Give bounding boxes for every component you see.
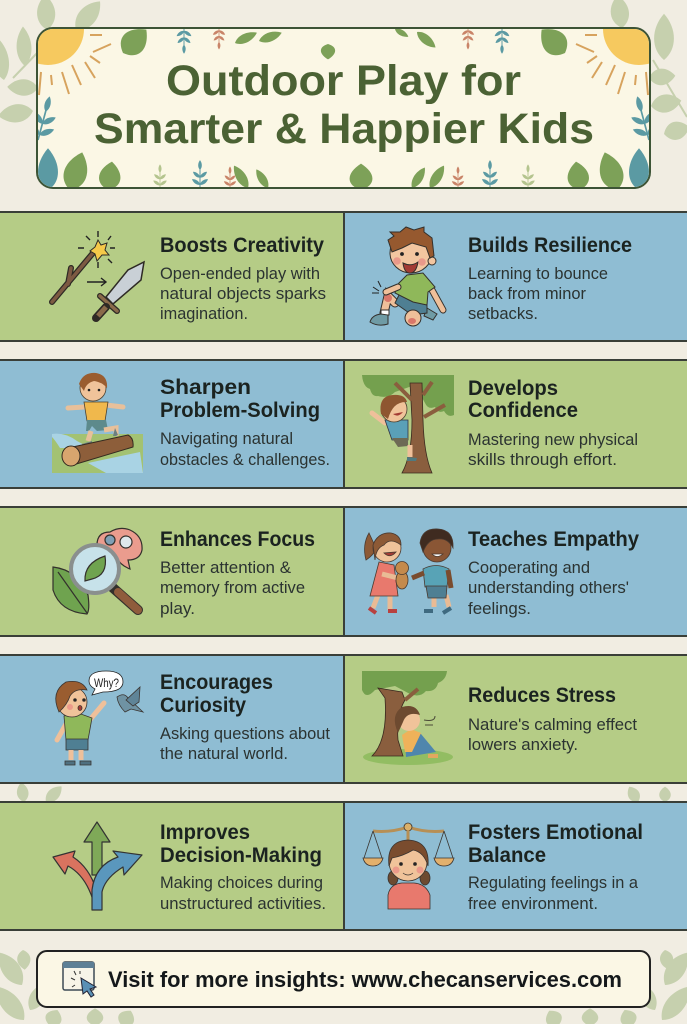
banner title text: Outdoor Play for bbox=[166, 57, 521, 105]
icon: child resting under a tree bbox=[362, 671, 453, 765]
card text bbox=[468, 234, 632, 323]
card text bbox=[468, 377, 638, 469]
card text: Improves bbox=[160, 821, 250, 844]
card text: Enhances Focus bbox=[160, 528, 315, 551]
card: Builds Resilience bbox=[344, 212, 687, 341]
card: Encourages Curiosity bbox=[0, 655, 344, 783]
icon: magnifier, leaf and brain bbox=[53, 528, 142, 614]
card text: Cooperating and bbox=[468, 559, 590, 577]
icon: browser window with cursor bbox=[63, 962, 96, 997]
banner title text: Smarter & Happier Kids bbox=[94, 105, 594, 153]
card text: Problem-Solving bbox=[160, 399, 320, 422]
card text: skills through effort. bbox=[468, 451, 617, 469]
card text: the natural world. bbox=[160, 745, 288, 763]
card text: natural objects sparks bbox=[160, 285, 326, 303]
icon: stick to sword bbox=[52, 231, 144, 318]
card text bbox=[468, 821, 643, 913]
icon: boy balancing on log bbox=[52, 373, 143, 473]
card text: Builds Resilience bbox=[468, 234, 632, 257]
card text: Fosters Emotional bbox=[468, 821, 643, 844]
icon: boy with scraped knee bbox=[370, 227, 443, 326]
title banner bbox=[36, 27, 651, 189]
icon: boy climbing tree bbox=[362, 375, 454, 473]
card: Develops Confidence bbox=[344, 360, 687, 488]
icon: branching arrows bbox=[53, 822, 142, 910]
card text: Boosts Creativity bbox=[160, 234, 324, 257]
card text: obstacles & challenges. bbox=[160, 451, 330, 469]
card: Improves Decision-Making bbox=[0, 802, 344, 930]
card text: Teaches Empathy bbox=[468, 528, 639, 551]
card text bbox=[468, 684, 637, 754]
banner decorations bbox=[12, 0, 675, 194]
card text: Balance bbox=[468, 844, 546, 867]
card text: Mastering new physical bbox=[468, 431, 638, 449]
card text: Better attention & bbox=[160, 559, 291, 577]
icon: boy asking why about a bird bbox=[56, 671, 143, 765]
card: Boosts Creativity bbox=[0, 212, 344, 341]
card text: setbacks. bbox=[468, 305, 538, 323]
card: Fosters Emotional Balance bbox=[344, 802, 687, 930]
card text: Regulating feelings in a bbox=[468, 874, 639, 892]
card text: Decision-Making bbox=[160, 844, 322, 867]
icon: boy asking why about a bird: Why? bbox=[94, 678, 119, 690]
card text: unstructured activities. bbox=[160, 895, 326, 913]
card text: Confidence bbox=[468, 399, 578, 422]
card text: Reduces Stress bbox=[468, 684, 616, 707]
card text: play. bbox=[160, 600, 195, 618]
footer text: Visit for more insights: www.checanservices.com bbox=[108, 967, 622, 992]
card text: free environment. bbox=[468, 895, 598, 913]
card text: understanding others' bbox=[468, 579, 629, 597]
card text: Learning to bounce bbox=[468, 265, 608, 283]
card text: Nature's calming effect bbox=[468, 716, 637, 734]
card text: memory from active bbox=[160, 579, 305, 597]
card text: back from minor bbox=[468, 285, 587, 303]
card text bbox=[160, 234, 326, 323]
card text: Navigating natural bbox=[160, 430, 293, 448]
card text bbox=[160, 821, 326, 913]
card: Reduces Stress bbox=[344, 655, 687, 783]
card text: lowers anxiety. bbox=[468, 736, 578, 754]
card text: imagination. bbox=[160, 305, 248, 323]
card text: Develops bbox=[468, 377, 558, 400]
card text: feelings. bbox=[468, 600, 531, 618]
footer call to action bbox=[37, 951, 650, 1007]
card text: Asking questions about bbox=[160, 725, 330, 743]
card text: Making choices during bbox=[160, 874, 323, 892]
card text: Encourages bbox=[160, 671, 273, 694]
card text: Sharpen bbox=[160, 376, 251, 399]
card: Enhances Focus bbox=[0, 507, 344, 636]
icon: two children sharing a teddy bbox=[365, 529, 453, 613]
card text: Open-ended play with bbox=[160, 265, 320, 283]
icon: girl with balance scales bbox=[363, 823, 454, 909]
card text bbox=[160, 528, 315, 618]
card text bbox=[160, 671, 330, 763]
card: Sharpen Problem-Solving bbox=[0, 360, 344, 488]
card text: Curiosity bbox=[160, 694, 246, 717]
card: Teaches Empathy bbox=[344, 507, 687, 636]
card text bbox=[160, 376, 330, 469]
banner title text bbox=[94, 57, 594, 153]
card text bbox=[468, 528, 639, 618]
